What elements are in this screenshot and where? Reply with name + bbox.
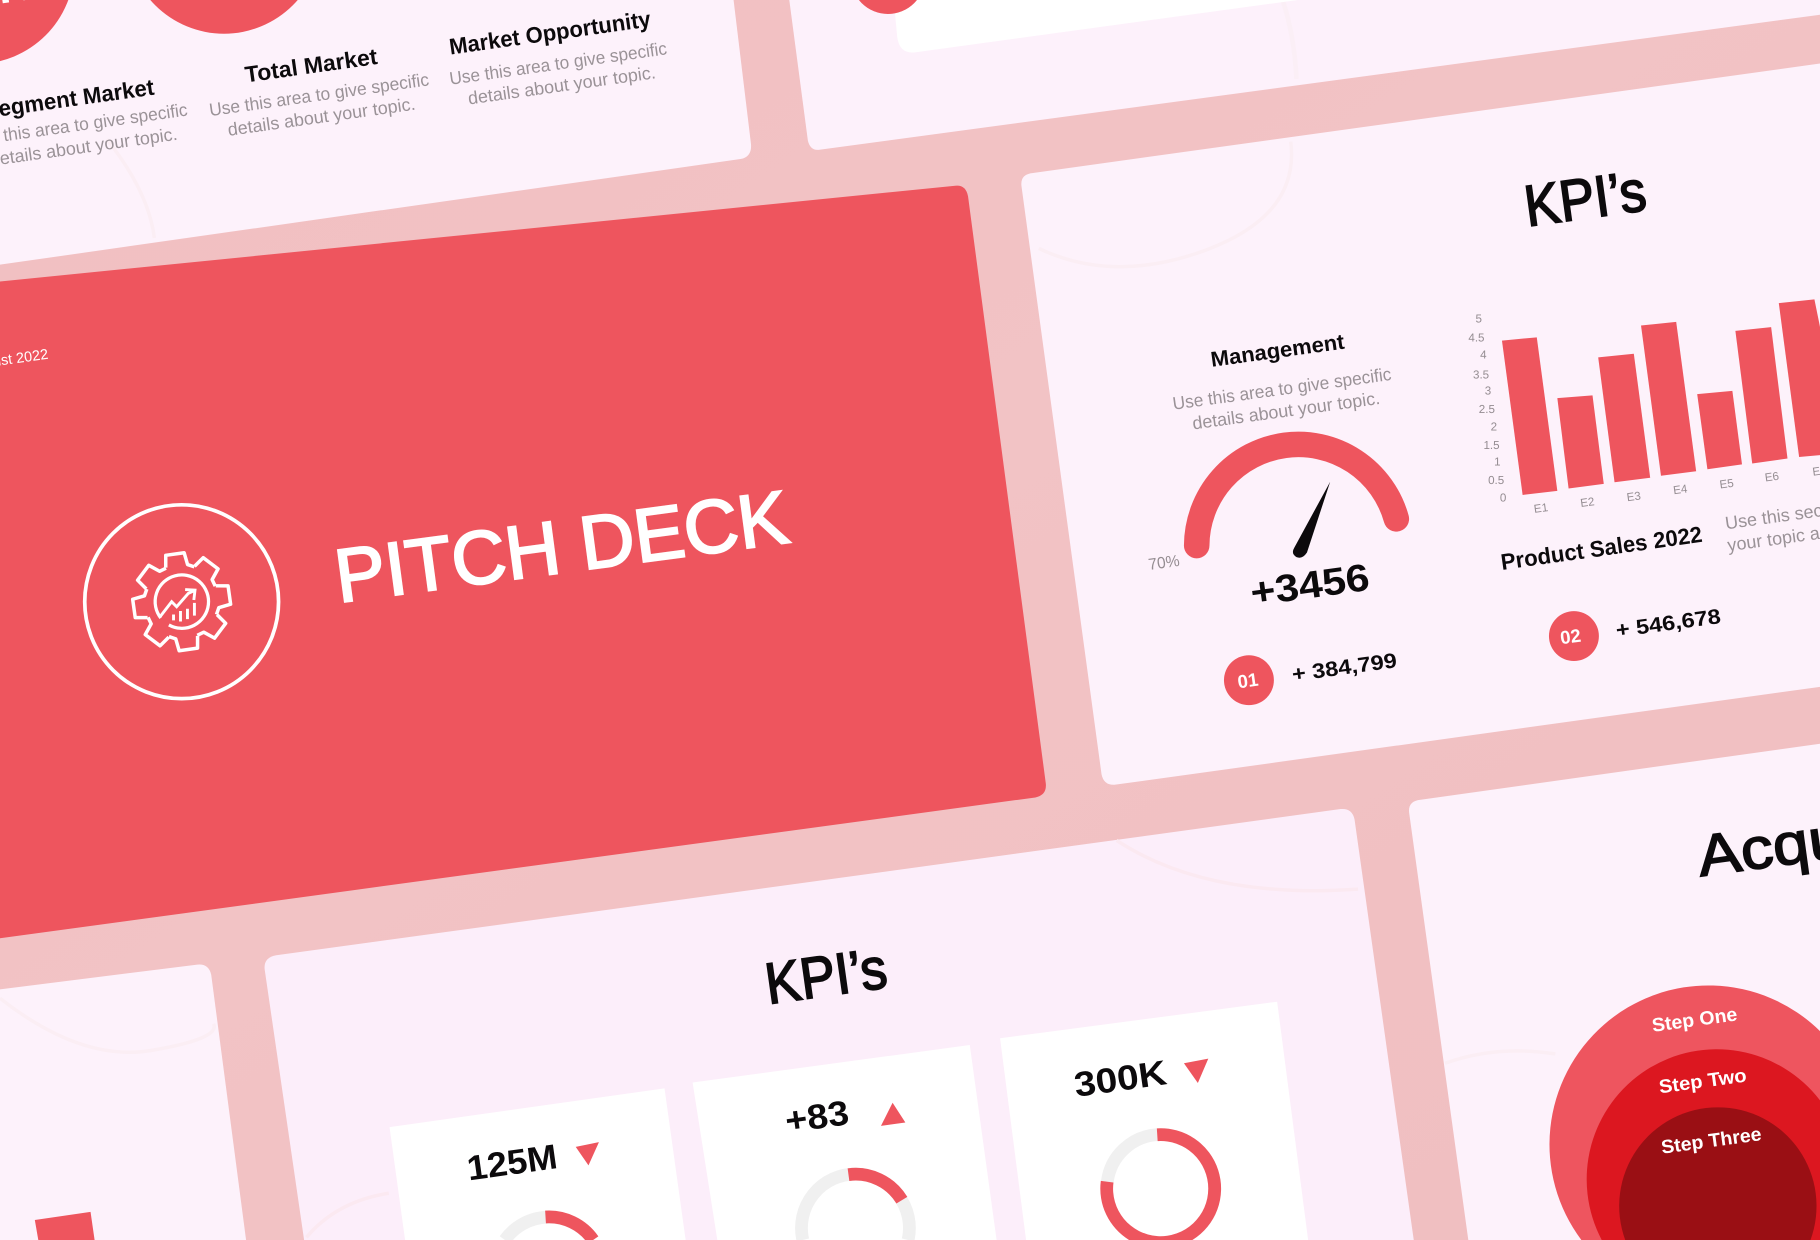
bar chart: 0 <box>1500 492 1507 505</box>
total market text <box>208 44 431 140</box>
total market text: Total Market <box>243 44 380 88</box>
segment market text <box>0 75 189 171</box>
market opportunity text: Market Opportunity <box>448 7 652 60</box>
panel: title slide <box>0 186 1046 939</box>
segment market circle <box>0 0 74 64</box>
stat 02 <box>1549 605 1722 661</box>
bar chart: 4 <box>1480 349 1487 362</box>
market opportunity text <box>448 7 669 109</box>
red circle <box>851 0 925 14</box>
stat 01 <box>1224 649 1398 705</box>
bar chart: 2 <box>1491 421 1498 434</box>
bar chart: E1 <box>1533 502 1549 516</box>
stat 01: + 384,799 <box>1291 649 1398 686</box>
bar chart: 0.5 <box>1488 475 1505 488</box>
management text: Management <box>1209 329 1346 371</box>
bar chart <box>1468 299 1820 516</box>
bar chart: 2.5 <box>1479 404 1495 417</box>
gauge <box>1147 444 1396 573</box>
title: PITCH DECK <box>330 474 793 619</box>
bar chart: 4.5 <box>1468 332 1485 345</box>
icon: gear with growth chart <box>85 505 279 699</box>
funnel circles: Step One <box>1651 1004 1739 1037</box>
management text: details about your topic. <box>1191 389 1381 434</box>
panel: bottom left slide <box>0 964 246 1240</box>
white card <box>894 0 1298 53</box>
panel: KPI cards slide <box>265 809 1414 1240</box>
heading: KPI’s <box>1520 158 1650 239</box>
red bar <box>35 1212 95 1240</box>
card: 300K: 300K <box>1072 1054 1169 1105</box>
funnel circles <box>1549 985 1820 1240</box>
bar chart: 1 <box>1494 456 1501 469</box>
bar chart: 1.5 <box>1483 440 1500 453</box>
total market text: Use this area to give specific <box>208 70 431 121</box>
funnel circles: Step Two <box>1658 1065 1748 1098</box>
bar chart: 3 <box>1485 385 1492 398</box>
bar chart: E6 <box>1764 470 1780 485</box>
needle <box>1293 482 1330 558</box>
stat 01: 01 <box>1236 671 1260 693</box>
panel: top right slide <box>789 0 1820 150</box>
panel: market sizes <box>0 0 751 265</box>
chart caption: Product Sales 2022 <box>1499 522 1704 576</box>
gauge value: +3456 <box>1248 555 1372 614</box>
bar chart: 5 <box>1476 313 1482 326</box>
market opportunity text: Use this area to give specific <box>448 39 669 89</box>
bar chart: E3 <box>1626 490 1642 505</box>
bar chart: E5 <box>1719 477 1735 492</box>
bar chart: E4 <box>1672 483 1689 498</box>
management text: Use this area to give specific <box>1171 365 1393 414</box>
stat 02: + 546,678 <box>1614 605 1722 642</box>
panel: KPI slide with gauge and bars <box>1021 63 1820 785</box>
gauge: 70% <box>1147 551 1181 573</box>
card: +83: +83 <box>783 1094 851 1141</box>
panel: acquisition slide <box>1409 743 1820 1240</box>
card: 125M <box>390 1088 686 1240</box>
card: 125M: 125M <box>465 1138 560 1189</box>
card: 300K <box>1000 1002 1308 1240</box>
management text <box>1171 329 1393 434</box>
card: +83 <box>693 1045 997 1240</box>
total market circle <box>127 0 322 34</box>
market opportunity text: details about your topic. <box>467 63 657 109</box>
heading: KPI’s <box>761 935 891 1017</box>
bar chart: E2 <box>1580 496 1596 511</box>
total market text: details about your topic. <box>227 95 417 140</box>
bar chart: 3.5 <box>1473 369 1490 382</box>
funnel circles: Step Three <box>1660 1124 1763 1158</box>
stat 02: 02 <box>1559 626 1582 649</box>
